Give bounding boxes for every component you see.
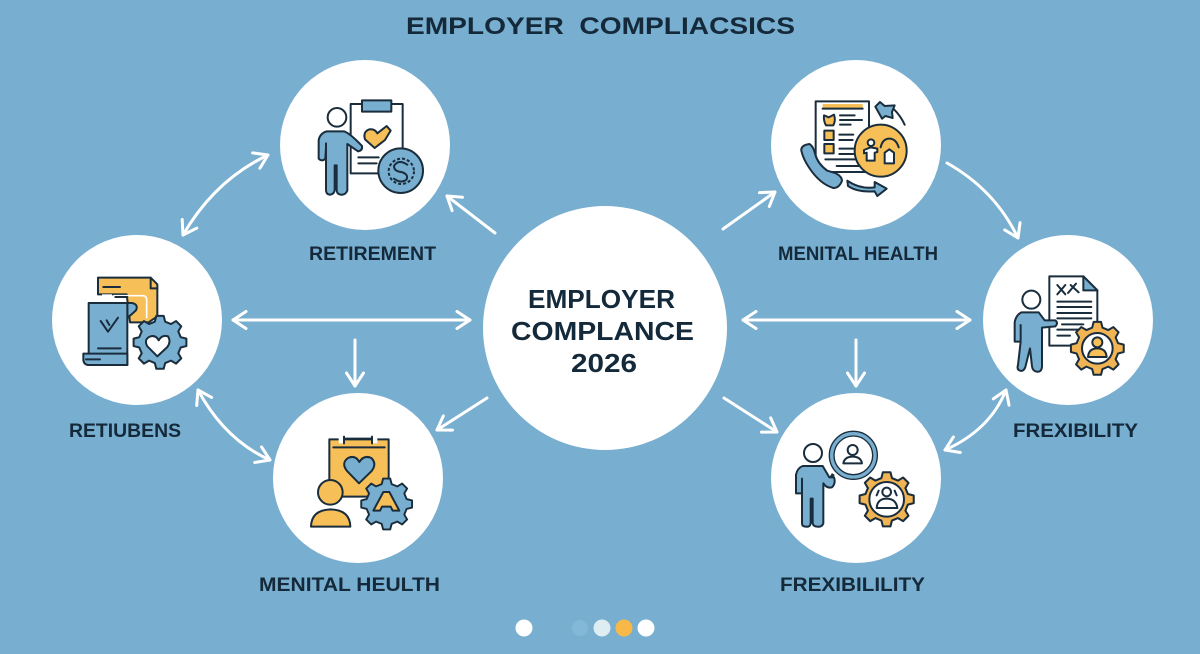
label: FREXIBILITY	[1013, 421, 1138, 442]
label: MENITAL HEULTH	[259, 575, 440, 596]
label: FREXIBILILITY	[780, 575, 925, 596]
icon: person with document and gear	[1015, 276, 1124, 375]
node: mental health bottom	[259, 393, 443, 596]
label: RETIREMENT	[309, 244, 436, 265]
center hub: 2026	[571, 348, 637, 378]
center hub: COMPLANCE	[511, 316, 694, 346]
pagination dots	[516, 620, 654, 636]
title: EMPLOYER COMPLIACSICS	[406, 13, 795, 40]
label: MENITAL HEALTH	[778, 244, 938, 265]
node: flexibility right	[983, 235, 1153, 442]
icon: calendar heart, person and gear	[311, 436, 412, 529]
node: retirement	[280, 60, 450, 265]
icon: person with clipboard and coin	[319, 100, 423, 195]
arrows	[183, 155, 1018, 460]
center hub: EMPLOYER	[528, 284, 675, 314]
node: flexibility bottom	[771, 393, 941, 596]
icon: document, folder and heart gear	[83, 278, 186, 369]
node: retirement benefits left	[52, 235, 222, 442]
label: RETIUBENS	[69, 421, 181, 442]
icon: checklist, phone and family	[801, 101, 907, 196]
center hub	[483, 206, 727, 450]
node: mental health top	[771, 60, 941, 265]
icon: person with magnifier and gear	[796, 431, 914, 527]
